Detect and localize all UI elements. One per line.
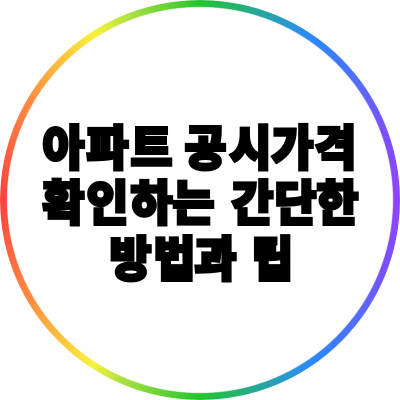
title line 2: 확인하는 간단한	[42, 177, 358, 230]
title line 1: 아파트 공시가격	[42, 122, 356, 175]
title line 3: 방법과 팁	[110, 233, 293, 286]
